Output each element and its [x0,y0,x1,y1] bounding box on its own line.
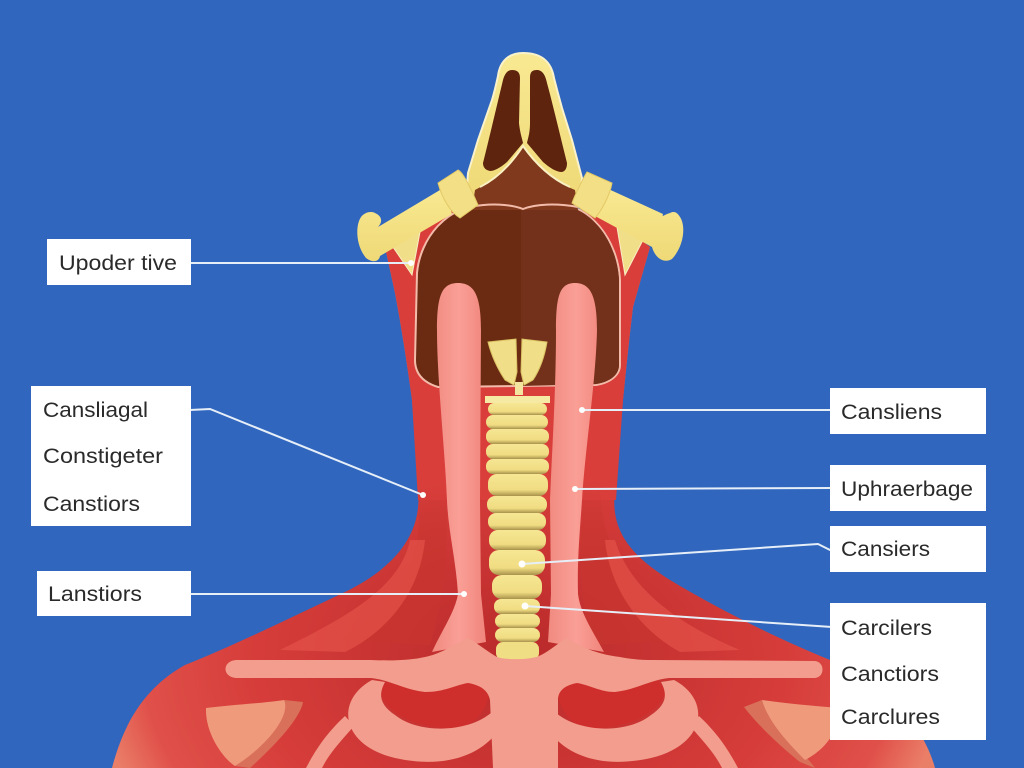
label: Cansliens [579,388,986,434]
left neck muscle [432,283,486,652]
label: Cansiers: Cansiers [841,537,930,561]
label: Cansliens: Cansliens [841,400,942,424]
cavity right half [521,205,619,386]
label group: Carcilers, Canctiors, Carclures: Carclures [841,705,940,729]
head cavity [415,204,620,387]
label: Uphraerbage [572,465,986,511]
label group: Carcilers, Canctiors, Carclures: Canctiors [841,662,939,686]
left clavicle bone [357,170,478,275]
label group: Carcilers, Canctiors, Carclures [522,602,986,740]
right clavicle bone [572,172,683,275]
right neck muscle [548,283,604,652]
palate pale edge [480,146,570,187]
label group: Cansliagal, Constigeter, Canstiors [31,386,426,526]
label group: Cansliagal, Constigeter, Canstiors: Cansliagal [43,398,148,422]
nasal passage right [527,70,567,172]
label: Cansiers [518,526,986,572]
palate wedge [472,147,578,210]
neck and shoulders [112,210,935,768]
sternum and clavicles [226,638,822,768]
left neck muscle highlight [280,540,425,652]
nasal bone [466,53,582,210]
left neck muscle shading [340,480,447,645]
head cavity top edge [470,205,578,209]
nasal passage left [483,70,523,171]
label group: Cansliagal, Constigeter, Canstiors: Canstiors [43,492,140,516]
label group: Carcilers, Canctiors, Carclures: Carcilers [841,616,932,640]
vertebral column [485,396,550,660]
label: Upoder tive [47,239,414,285]
chest cavities [380,672,666,728]
rib arcs [306,680,738,768]
left shoulder patch [206,700,303,768]
label group: Cansliagal, Constigeter, Canstiors: Constigeter [43,444,163,468]
label: Lanstiors: Lanstiors [48,582,142,606]
label: Lanstiors [37,571,467,616]
larynx cartilage [488,339,547,395]
right neck muscle shading [581,480,690,645]
right shoulder patch [744,700,840,768]
label: Uphraerbage: Uphraerbage [841,477,973,501]
label: Upoder tive: Upoder tive [59,251,177,275]
right neck muscle highlight [605,540,740,652]
upper neck red [385,210,650,500]
